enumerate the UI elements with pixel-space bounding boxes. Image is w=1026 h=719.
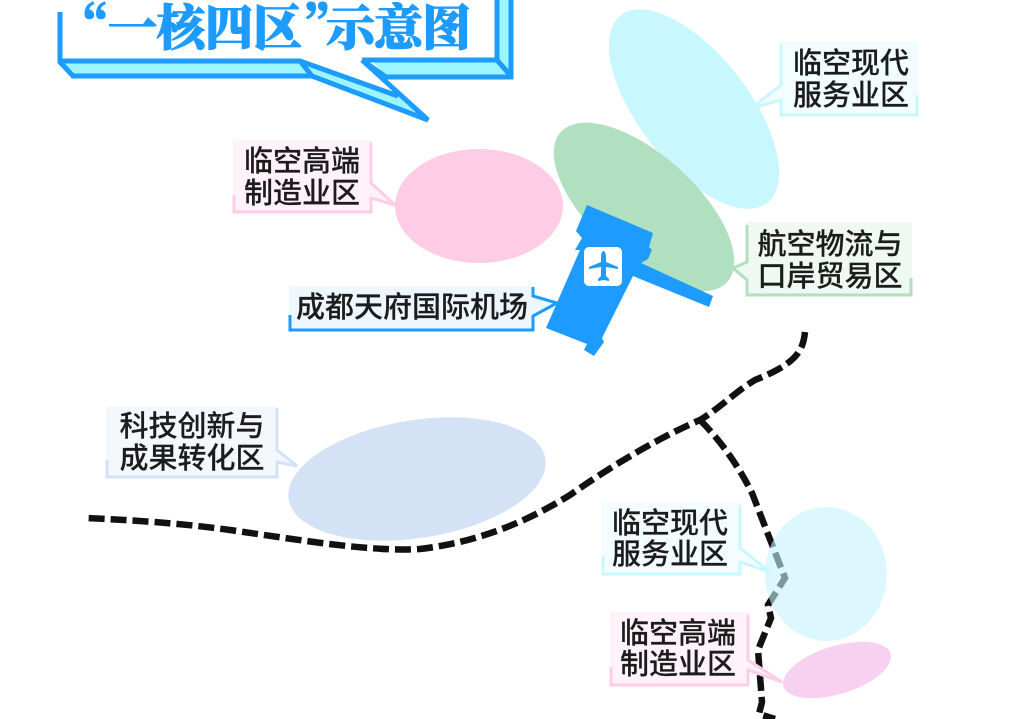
label: lower modern services <box>602 502 770 575</box>
zone: science and technology innovation <box>279 400 555 558</box>
label: upper high-end manufacturing <box>233 140 395 212</box>
label: upper high-end manufacturing: 临空高端 <box>244 145 360 178</box>
title callout bubble <box>60 0 511 120</box>
label: science and technology innovation: 科技创新与 <box>119 410 265 443</box>
label: aviation logistics and port trade <box>733 222 912 296</box>
airport terminal <box>546 205 713 356</box>
zone: lower high-end manufacturing <box>776 631 898 709</box>
label: aviation logistics and port trade: 口岸贸易区 <box>757 260 903 293</box>
label: Chengdu Tianfu International Airport <box>289 286 557 331</box>
label: upper modern services: 临空现代 <box>793 47 909 80</box>
label: lower high-end manufacturing <box>610 612 782 686</box>
label: lower high-end manufacturing: 制造业区 <box>620 648 736 681</box>
label: upper modern services <box>752 42 918 116</box>
dashed road <box>85 332 805 719</box>
label: lower modern services: 服务业区 <box>612 538 728 571</box>
title text <box>60 0 471 60</box>
label: lower modern services: 临空现代 <box>612 507 728 540</box>
zone: upper high-end manufacturing <box>395 149 563 263</box>
zone: lower modern services <box>765 507 887 641</box>
label: Chengdu Tianfu International Airport: 成都天府国际机场 <box>296 291 528 324</box>
zone: upper modern services <box>577 0 811 237</box>
airport <box>546 205 713 356</box>
label: upper high-end manufacturing: 制造业区 <box>244 177 360 210</box>
label: lower high-end manufacturing: 临空高端 <box>620 617 736 650</box>
zone: aviation logistics and port trade <box>526 93 762 321</box>
label: aviation logistics and port trade: 航空物流与 <box>757 228 903 261</box>
icon: airplane <box>584 247 622 286</box>
label: upper modern services: 服务业区 <box>793 79 909 112</box>
label: science and technology innovation: 成果转化区 <box>119 442 265 475</box>
label: science and technology innovation <box>106 406 297 478</box>
